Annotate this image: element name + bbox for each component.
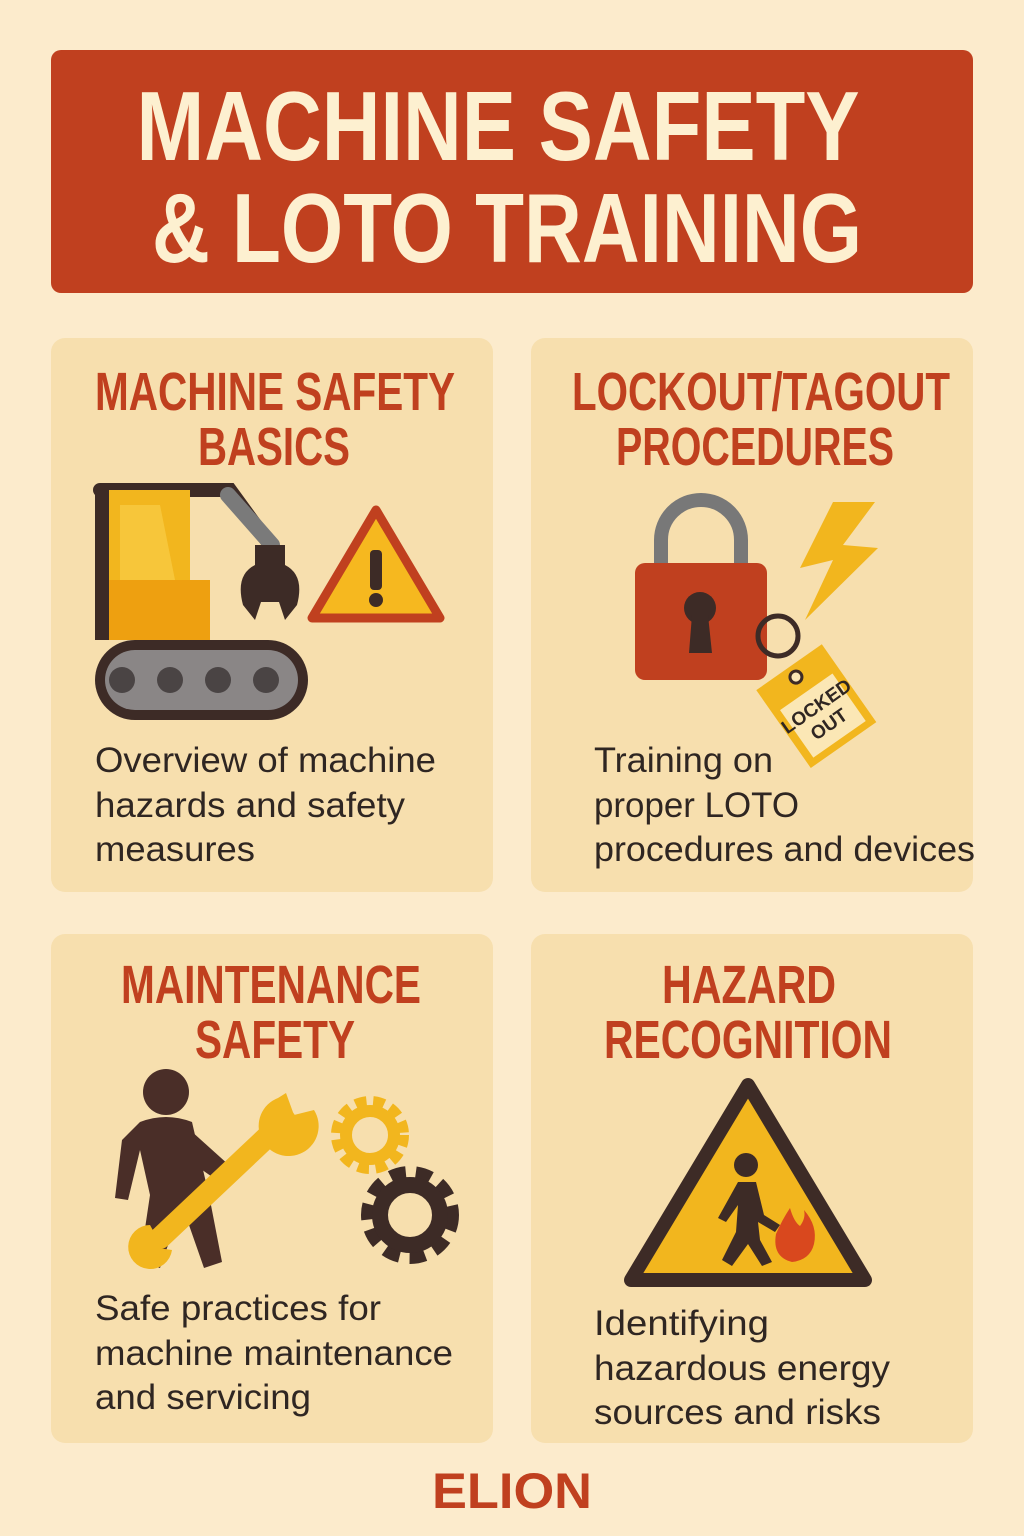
text: maintenance description: Safe practices for [95, 1289, 381, 1328]
heading: hazard recognition [604, 955, 892, 1070]
icon: worker [115, 1069, 240, 1268]
panel: maintenance safety [51, 934, 493, 1443]
title banner: & LOTO TRAINING [152, 173, 862, 283]
panel: hazard recognition [531, 934, 973, 1443]
text: lockout description: proper LOTO [594, 786, 799, 825]
icon: wrench [128, 1093, 319, 1269]
icon: warning triangle [312, 510, 440, 618]
icon: excavator [95, 490, 308, 720]
heading: machine safety basics: MACHINE SAFETY [95, 362, 455, 422]
heading: hazard recognition: RECOGNITION [604, 1010, 892, 1070]
heading: machine safety basics: BASICS [198, 417, 350, 477]
text: lockout description: Training on [594, 741, 773, 780]
text: hazard description: Identifying [594, 1304, 769, 1343]
text: lockout description: procedures and devices [594, 830, 975, 869]
heading: lockout/tagout procedures [572, 362, 950, 477]
text: maintenance description [95, 1289, 453, 1417]
icon: hazard triangle with person and flame [631, 1085, 865, 1280]
heading: lockout/tagout procedures: PROCEDURES [616, 417, 894, 477]
icon: locked out tag [756, 616, 876, 768]
icon: lightning bolt [800, 502, 878, 620]
text: machine safety basics description: hazards and safety [95, 786, 406, 825]
icon: padlock [635, 500, 767, 680]
text: machine safety basics description [95, 741, 436, 869]
icon: locked out tag: LOCKED [778, 675, 856, 739]
icon: locked out tag: OUT [807, 705, 852, 745]
heading: maintenance safety [121, 955, 421, 1070]
footer brand: ELION [432, 1463, 592, 1519]
icon: gears [340, 1105, 448, 1253]
heading: maintenance safety: MAINTENANCE [121, 955, 421, 1015]
title banner: MACHINE SAFETY [136, 71, 860, 181]
text: hazard description [594, 1304, 891, 1432]
heading: machine safety basics [95, 362, 455, 477]
text: machine safety basics description: Overview of machine [95, 741, 436, 780]
text: lockout description [594, 741, 975, 869]
heading: hazard recognition: HAZARD [662, 955, 836, 1015]
text: maintenance description: machine maintenance [95, 1334, 453, 1373]
text: hazard description: sources and risks [594, 1393, 881, 1432]
text: maintenance description: and servicing [95, 1378, 311, 1417]
title banner [51, 50, 973, 293]
panel: lockout/tagout procedures [531, 338, 975, 892]
text: machine safety basics description: measures [95, 830, 255, 869]
heading: maintenance safety: SAFETY [195, 1010, 355, 1070]
text: hazard description: hazardous energy [594, 1349, 891, 1388]
panel: machine safety basics [51, 338, 493, 892]
